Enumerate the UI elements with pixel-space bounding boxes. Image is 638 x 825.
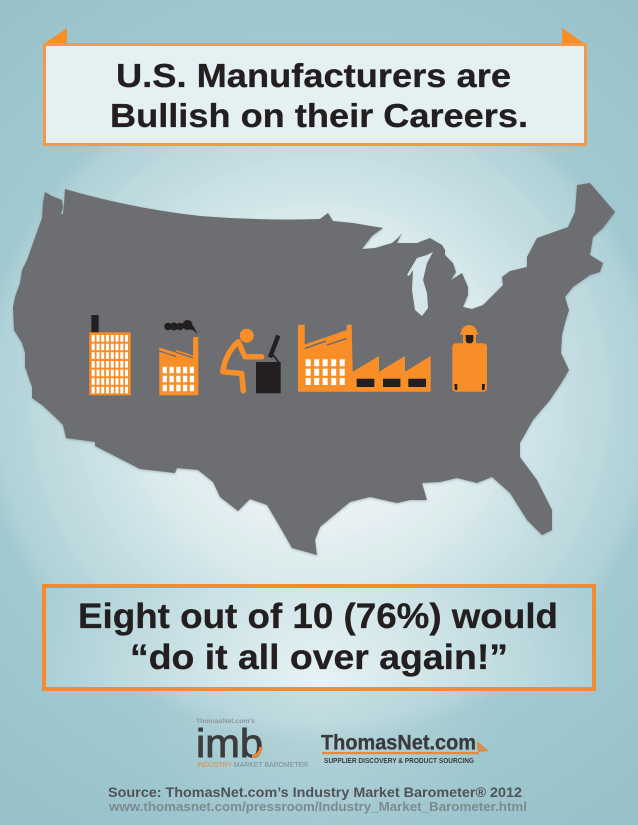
logo: ThomasNet.com: ThomasNet.com (321, 732, 476, 754)
banner right fold (562, 28, 585, 44)
source line: Source: ThomasNet.com’s Industry Market Barometer® 2012 (108, 785, 522, 800)
source url: www.thomasnet.com/pressroom/Industry_Market_Barometer.html (108, 799, 527, 814)
callout box (44, 586, 594, 689)
banner left fold (44, 28, 67, 44)
map of the United States (13, 183, 615, 555)
banner box (44, 44, 586, 144)
logo: IMB: INDUSTRY MARKET BAROMETER (197, 760, 308, 769)
icon: office tower (89, 315, 131, 395)
icon: seated worker at computer (223, 329, 281, 393)
logo: IMB: ThomasNet.com's (196, 718, 255, 725)
title text (110, 57, 528, 134)
callout text (78, 597, 558, 677)
logo: ThomasNet.com: SUPPLIER DISCOVERY & PRODUCT SOURCING (324, 758, 475, 765)
title banner (44, 28, 586, 144)
logo: IMB (196, 718, 308, 769)
icon: small factory with smoke (159, 320, 198, 395)
title text: Bullish on their Careers. (110, 97, 528, 134)
title text: U.S. Manufacturers are (116, 57, 511, 94)
lake michigan (407, 252, 433, 316)
logo: IMB: imb (196, 722, 263, 766)
logo: ThomasNet.com (321, 732, 489, 765)
callout text: Eight out of 10 (76%) would (78, 597, 558, 636)
callout text: “do it all over again!” (130, 638, 508, 677)
icon: worker in hard hat (452, 325, 487, 392)
icon: large factory (298, 325, 431, 392)
